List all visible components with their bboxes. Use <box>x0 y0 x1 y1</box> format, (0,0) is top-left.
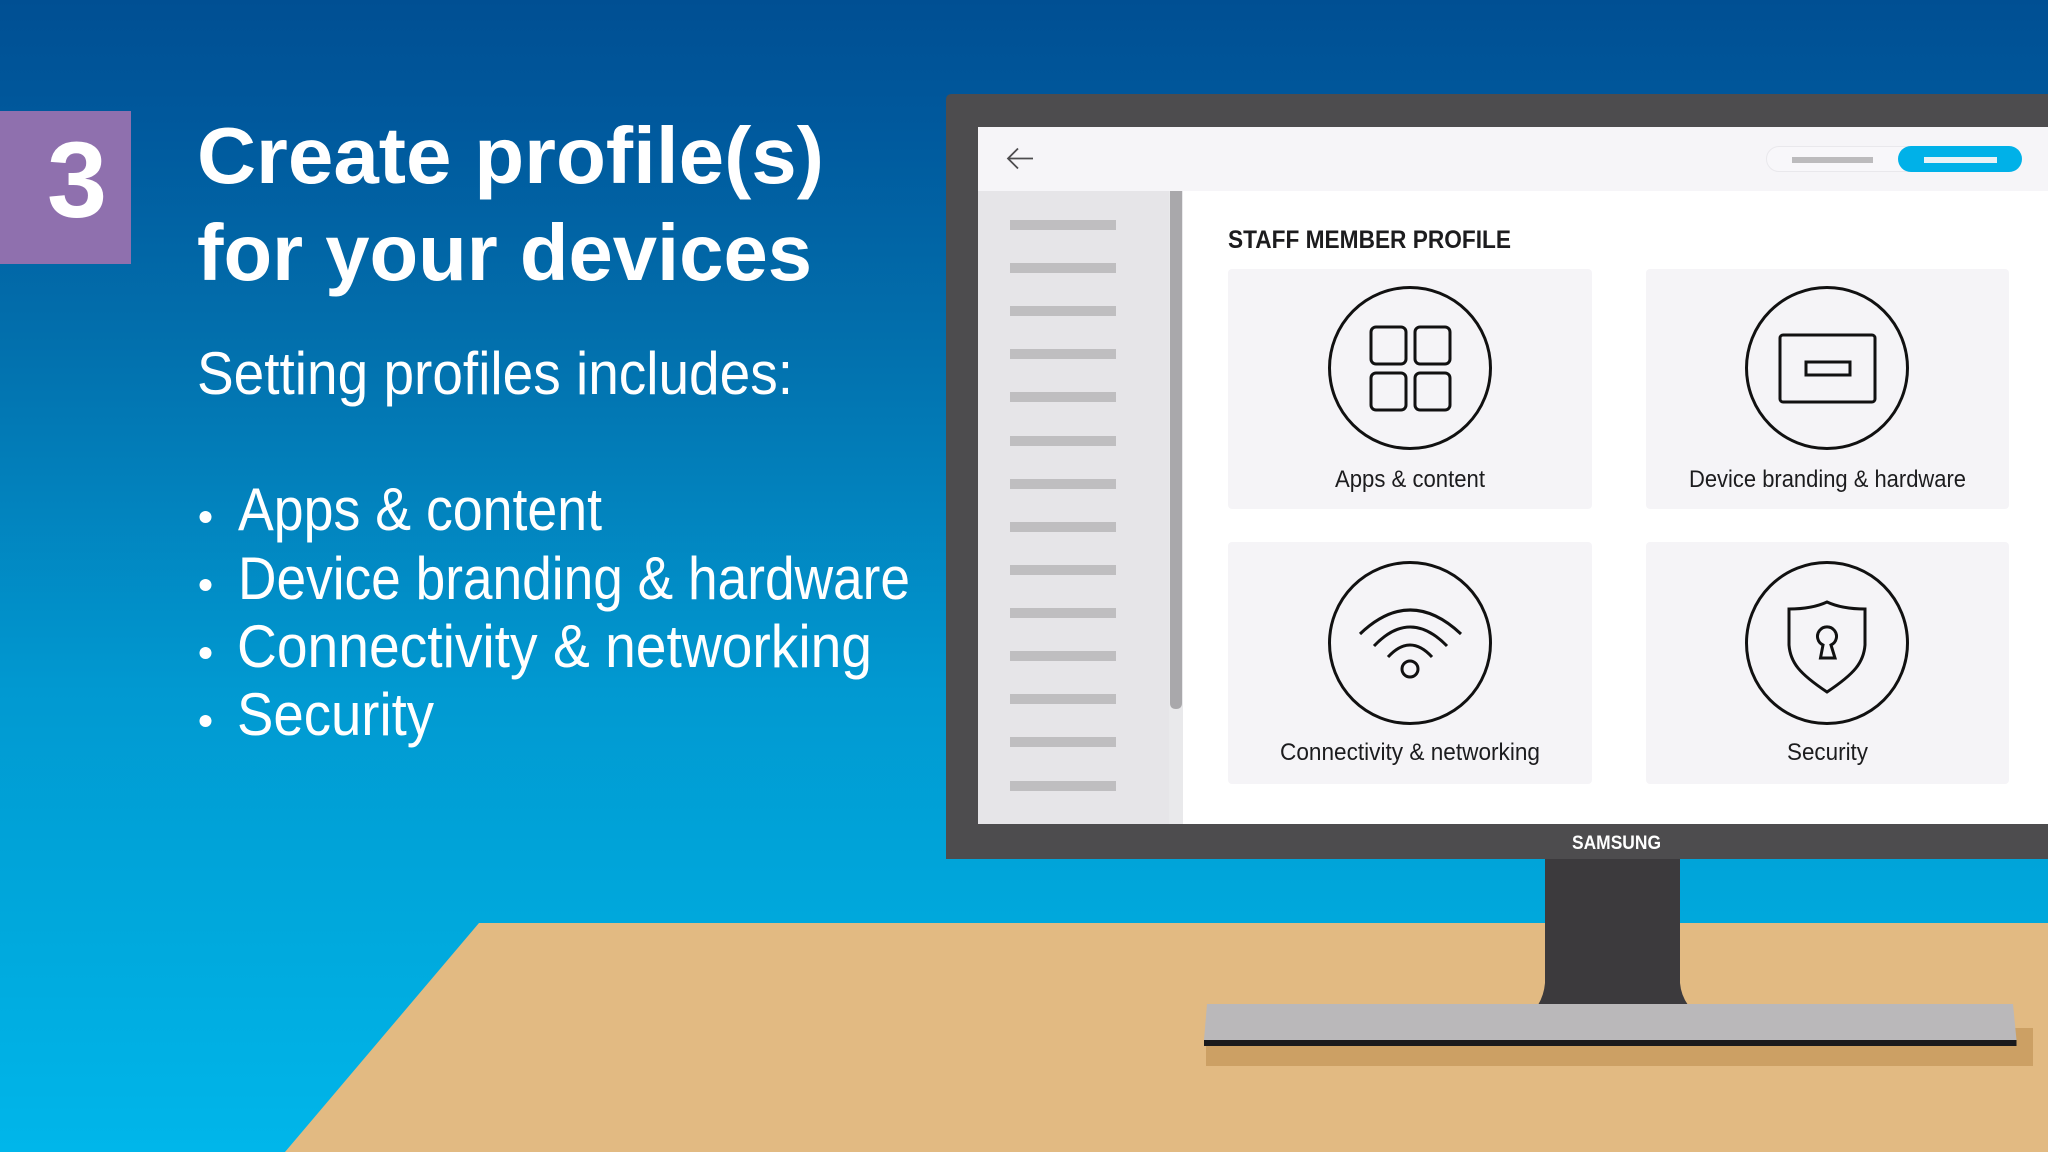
desk <box>285 923 2048 1152</box>
title: Create profile(s) <box>197 111 824 200</box>
label: Security <box>1787 739 1868 766</box>
bullet list: Connectivity & networking <box>237 613 872 680</box>
top bar <box>978 127 2048 191</box>
brand logo: SAMSUNG <box>1572 833 1661 854</box>
screen <box>978 127 2048 824</box>
label: Connectivity & networking <box>1280 739 1540 766</box>
card: apps and content <box>1228 269 1592 509</box>
monitor base <box>1204 1004 2016 1046</box>
card: connectivity and networking <box>1228 542 1592 784</box>
step number badge: 3 <box>47 119 107 240</box>
icon: app grid <box>1330 288 1490 448</box>
step number badge <box>0 111 131 264</box>
intro text: Setting profiles includes: <box>197 340 793 407</box>
label: Apps & content <box>1335 466 1485 493</box>
heading: STAFF MEMBER PROFILE <box>1228 226 1511 254</box>
label: Device branding & hardware <box>1689 466 1966 493</box>
icon: back arrow <box>1008 148 1033 168</box>
icon: device <box>1746 288 1908 448</box>
bullet list: Security <box>237 681 434 748</box>
sidebar <box>978 191 1183 824</box>
icon: shield with keyhole <box>1746 562 1908 724</box>
card: security <box>1646 542 2009 784</box>
title <box>197 111 824 297</box>
bullet list: Apps & content <box>238 476 602 543</box>
toggle buttons <box>1766 146 2022 172</box>
card: device branding and hardware <box>1646 269 2009 509</box>
bullet list: Device branding & hardware <box>238 545 910 612</box>
monitor shadow on desk <box>1206 1028 2033 1066</box>
title: for your devices <box>197 208 812 297</box>
scrollbar <box>1170 191 1182 709</box>
bullet list <box>200 476 910 748</box>
monitor stand <box>1538 855 1688 1005</box>
icon: wifi <box>1330 562 1490 724</box>
menu lines <box>1010 220 1116 791</box>
